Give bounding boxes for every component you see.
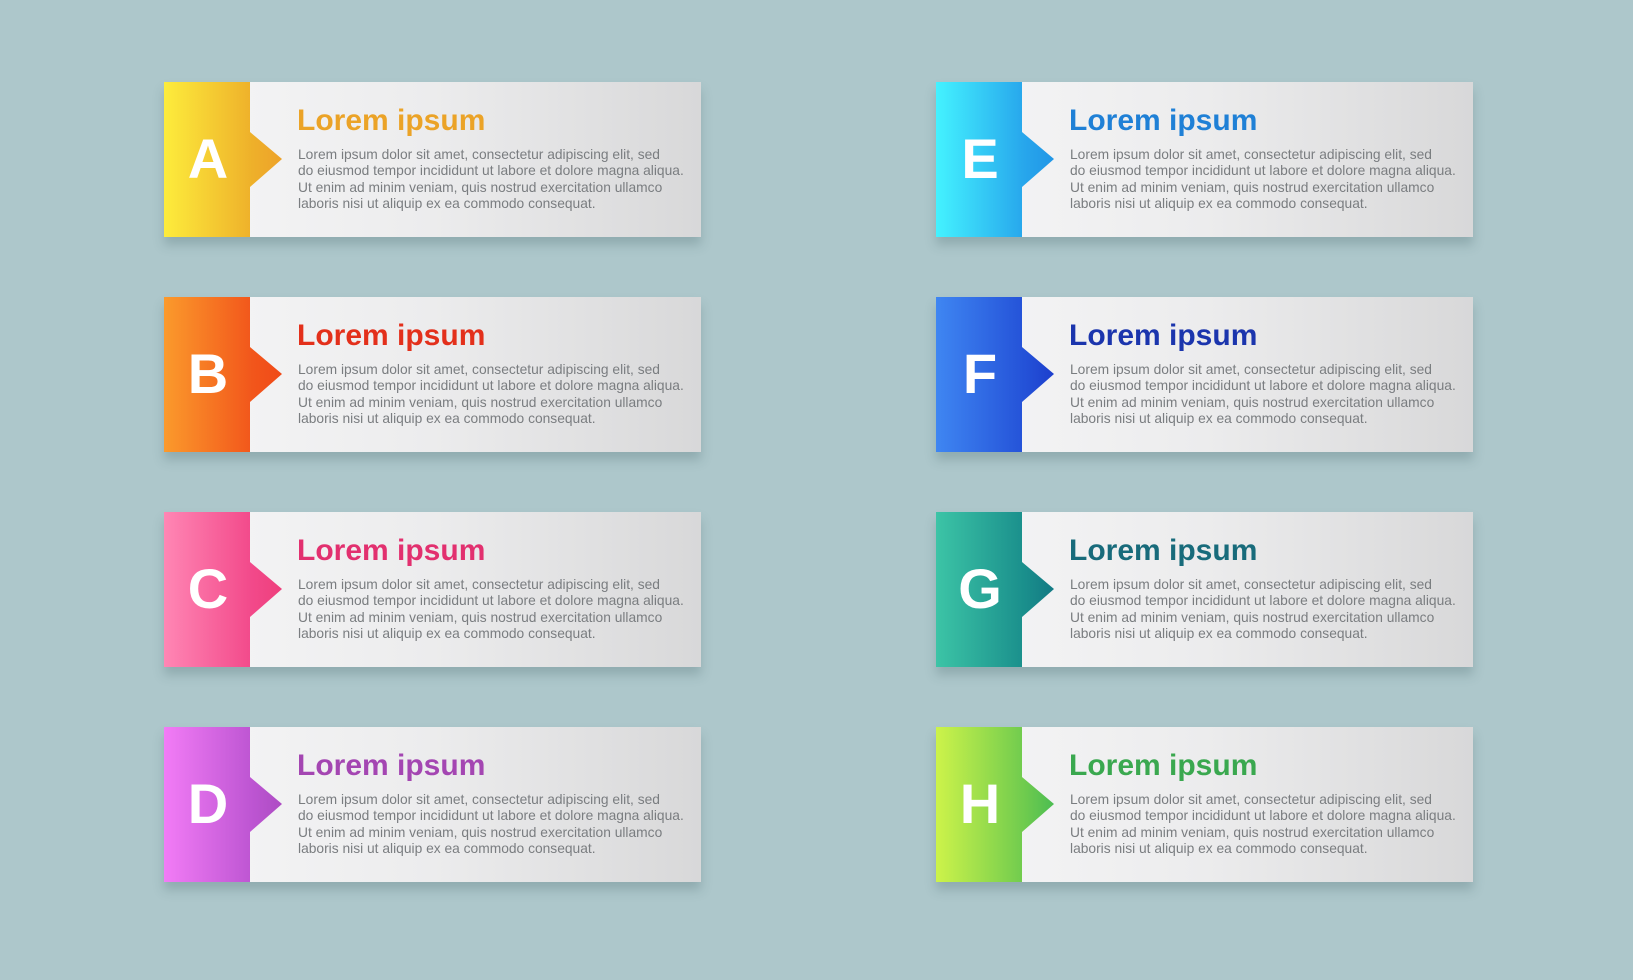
text B [298,362,684,426]
text C: do eiusmod tempor incididunt ut labore et dolore magna aliqua. [298,593,684,608]
text B: do eiusmod tempor incididunt ut labore et dolore magna aliqua. [298,378,684,393]
text D: Ut enim ad minim veniam, quis nostrud exercitation ullamco [298,825,662,840]
text H: laboris nisi ut aliquip ex ea commodo consequat. [1070,841,1368,856]
tab A [164,82,282,237]
letter B: B [188,342,228,405]
text G: do eiusmod tempor incididunt ut labore et dolore magna aliqua. [1070,593,1456,608]
text A: do eiusmod tempor incididunt ut labore et dolore magna aliqua. [298,163,684,178]
card H [932,727,1476,894]
tab G [936,512,1054,667]
text B: laboris nisi ut aliquip ex ea commodo consequat. [298,411,596,426]
letter G: G [958,557,1002,620]
title H: Lorem ipsum [1069,749,1257,782]
text A: Ut enim ad minim veniam, quis nostrud exercitation ullamco [298,180,662,195]
tab H [936,727,1054,882]
text B: Ut enim ad minim veniam, quis nostrud exercitation ullamco [298,395,662,410]
card G [932,512,1476,678]
text F: laboris nisi ut aliquip ex ea commodo consequat. [1070,411,1368,426]
text F: Lorem ipsum dolor sit amet, consectetur adipiscing elit, sed [1070,362,1432,377]
text D [298,792,684,856]
letter A: A [188,127,228,190]
text D: laboris nisi ut aliquip ex ea commodo consequat. [298,841,596,856]
text G [1070,577,1456,641]
card F [932,297,1476,464]
title G: Lorem ipsum [1069,534,1257,567]
text E: Lorem ipsum dolor sit amet, consectetur adipiscing elit, sed [1070,147,1432,162]
text A: Lorem ipsum dolor sit amet, consectetur adipiscing elit, sed [298,147,660,162]
tab C [164,512,282,667]
text E: Ut enim ad minim veniam, quis nostrud exercitation ullamco [1070,180,1434,195]
text H: Lorem ipsum dolor sit amet, consectetur adipiscing elit, sed [1070,792,1432,807]
text D: do eiusmod tempor incididunt ut labore et dolore magna aliqua. [298,808,684,823]
text H: do eiusmod tempor incididunt ut labore et dolore magna aliqua. [1070,808,1456,823]
text C: laboris nisi ut aliquip ex ea commodo consequat. [298,626,596,641]
card D [160,727,704,894]
text G: Ut enim ad minim veniam, quis nostrud exercitation ullamco [1070,610,1434,625]
text A [298,147,684,211]
tab E [936,82,1054,237]
text C [298,577,684,641]
text H: Ut enim ad minim veniam, quis nostrud exercitation ullamco [1070,825,1434,840]
text H [1070,792,1456,856]
tab F [936,297,1054,452]
text F [1070,362,1456,426]
title B: Lorem ipsum [297,319,485,352]
card C [160,512,704,678]
letter H: H [960,772,1000,835]
text D: Lorem ipsum dolor sit amet, consectetur adipiscing elit, sed [298,792,660,807]
letter C: C [188,557,228,620]
text C: Lorem ipsum dolor sit amet, consectetur adipiscing elit, sed [298,577,660,592]
text F: do eiusmod tempor incididunt ut labore et dolore magna aliqua. [1070,378,1456,393]
title E: Lorem ipsum [1069,104,1257,137]
text G: Lorem ipsum dolor sit amet, consectetur adipiscing elit, sed [1070,577,1432,592]
text E: laboris nisi ut aliquip ex ea commodo consequat. [1070,196,1368,211]
title A: Lorem ipsum [297,104,485,137]
title D: Lorem ipsum [297,749,485,782]
title F: Lorem ipsum [1069,319,1257,352]
tab B [164,297,282,452]
text C: Ut enim ad minim veniam, quis nostrud exercitation ullamco [298,610,662,625]
letter D: D [188,772,228,835]
text G: laboris nisi ut aliquip ex ea commodo consequat. [1070,626,1368,641]
card B [160,297,704,464]
text A: laboris nisi ut aliquip ex ea commodo consequat. [298,196,596,211]
text B: Lorem ipsum dolor sit amet, consectetur adipiscing elit, sed [298,362,660,377]
letter E: E [961,127,999,190]
text F: Ut enim ad minim veniam, quis nostrud exercitation ullamco [1070,395,1434,410]
card A [160,82,704,248]
text E [1070,147,1456,211]
letter F: F [963,342,997,405]
title C: Lorem ipsum [297,534,485,567]
tab D [164,727,282,882]
card E [932,82,1476,248]
text E: do eiusmod tempor incididunt ut labore et dolore magna aliqua. [1070,163,1456,178]
